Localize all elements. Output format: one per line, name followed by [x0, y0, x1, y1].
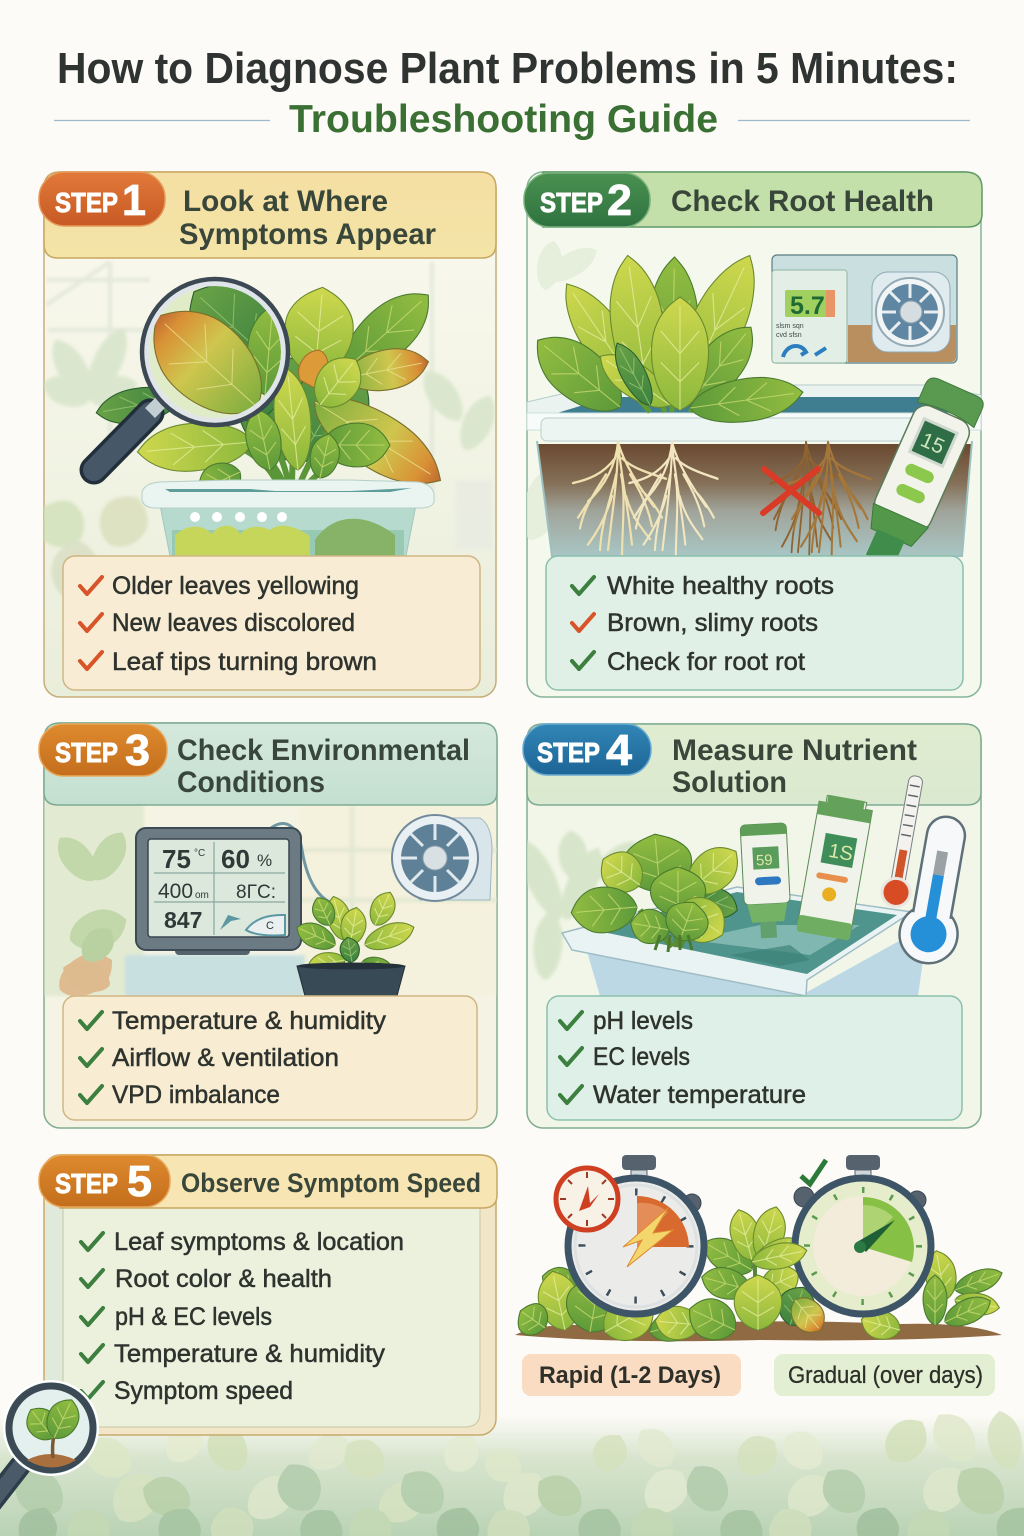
- heading: step 4: Solution: [672, 766, 787, 799]
- illustration: plant: [521, 244, 806, 429]
- checklist: step 5: pH & EC levels: [115, 1303, 272, 1331]
- illustration: faded leaves: [527, 241, 597, 540]
- badge: step 1: [39, 172, 165, 226]
- illustration: meter card and fan: 5.7: [790, 292, 825, 320]
- illustration: garden with stopwatches: [511, 1155, 1006, 1351]
- illustration: potted plant: [292, 888, 418, 996]
- icon: wall fan: [392, 815, 492, 901]
- illustration: cable: [271, 824, 337, 905]
- illustration: tub with roots: [527, 385, 981, 561]
- illustration: meter card and fan: slsm sqn: [776, 323, 804, 330]
- illustration: climate monitor: 8ΓC:: [236, 882, 276, 903]
- illustration: climate monitor: 847: [164, 907, 202, 933]
- label: gradual: Gradual (over days): [788, 1362, 983, 1389]
- label: rapid: [522, 1354, 741, 1396]
- checklist: step 3: VPD imbalance: [112, 1081, 280, 1109]
- heading: step 4: [672, 734, 917, 799]
- checklist: step 4: Water temperature: [593, 1081, 806, 1109]
- soil: [515, 1321, 1002, 1341]
- illustration: meters: 1S: [827, 840, 855, 866]
- heading: step 3: Check Environmental: [177, 734, 470, 767]
- icon: magnifier with seedling: [0, 1381, 98, 1502]
- illustration: greenhouse background: [26, 262, 503, 604]
- ground plants: [511, 1203, 1006, 1351]
- badge: step 5: [39, 1155, 170, 1207]
- left band: [45, 1205, 63, 1415]
- header 2: [543, 172, 982, 227]
- panel 3 frame: [44, 723, 497, 1128]
- heading: step 4: Measure Nutrient: [672, 734, 917, 767]
- checklist: step 5: Temperature & humidity: [114, 1340, 385, 1368]
- badge: step 2: 2: [607, 176, 632, 225]
- heading: step 3: Conditions: [177, 766, 325, 799]
- badge: step 2: STEP: [540, 187, 603, 218]
- badge: step 1: STEP: [55, 187, 118, 218]
- checklist: step 3: Airflow & ventilation: [112, 1044, 339, 1072]
- checklist: step 3: [63, 996, 477, 1120]
- illustration: meter card and fan: cvd sfsn: [776, 332, 802, 339]
- icon: rapid stopwatch: [568, 1155, 704, 1314]
- badge: step 2: [524, 173, 650, 227]
- background foliage strip: [0, 1404, 1024, 1536]
- illustration: climate monitor: 75: [162, 844, 191, 874]
- illustration: climate monitor: om: [195, 890, 209, 901]
- header 1: [44, 172, 496, 258]
- panel: step 3: [39, 723, 497, 1128]
- checklist: step 4: EC levels: [593, 1043, 690, 1071]
- badge: step 3: 3: [125, 726, 150, 775]
- heading: step 3: [177, 734, 470, 799]
- panel: step 4: [509, 724, 981, 1128]
- label: gradual: [774, 1354, 995, 1396]
- illustration: root meter: [852, 375, 986, 574]
- heading: step 5: Observe Symptom Speed: [181, 1168, 481, 1198]
- title: How to Diagnose Plant Problems in 5 Minutes:: [57, 44, 958, 93]
- title: [54, 44, 970, 141]
- checklist: step 1: [63, 556, 480, 690]
- checklist: step 5: [63, 1205, 480, 1427]
- illustration: climate monitor: C: [266, 920, 274, 932]
- illustration: room background: [44, 800, 497, 1006]
- header 4: [527, 724, 981, 805]
- illustration: meters: [740, 793, 874, 941]
- illustration: plant in tub: [93, 277, 455, 556]
- checklist: step 1: Leaf tips turning brown: [112, 648, 377, 676]
- label: rapid: Rapid (1-2 Days): [539, 1362, 721, 1389]
- checklist: step 2: White healthy roots: [607, 572, 834, 600]
- badge: step 1: 1: [122, 176, 146, 225]
- illustration: meters: 59: [756, 852, 773, 869]
- tub: [160, 505, 416, 556]
- icon: green check: [801, 1160, 826, 1184]
- panel 5 frame: [44, 1155, 496, 1435]
- heading: step 1: Look at Where: [183, 185, 388, 218]
- illustration: meter card and fan: [772, 255, 957, 363]
- checklist: step 5: Leaf symptoms & location: [114, 1228, 404, 1256]
- illustration: climate monitor: °C: [194, 848, 205, 859]
- heading: step 1: Symptoms Appear: [179, 218, 436, 251]
- checklist: step 4: pH levels: [593, 1007, 693, 1035]
- checklist: step 5: Root color & health: [115, 1265, 332, 1293]
- panel: step 1: [26, 172, 503, 697]
- illustration: climate monitor: [136, 828, 301, 955]
- heading: step 1: [179, 185, 436, 251]
- leaf overlapping stopwatch: [749, 1238, 809, 1274]
- badge: step 3: STEP: [55, 737, 118, 768]
- illustration: climate monitor: 400: [158, 880, 193, 903]
- checklist: step 4: [547, 996, 962, 1120]
- panel 1 frame: [44, 172, 496, 697]
- icon: blue thermometer: [895, 812, 978, 968]
- badge: step 4: 4: [606, 726, 633, 775]
- icon: gradual stopwatch: [794, 1155, 931, 1314]
- illustration: nutrient tub: [562, 887, 928, 996]
- checklist: step 2: [546, 556, 963, 690]
- checklist: step 1: Older leaves yellowing: [112, 572, 359, 600]
- badge: step 5: STEP: [55, 1168, 118, 1199]
- badge: step 5: 5: [127, 1157, 152, 1206]
- header 5: [60, 1155, 497, 1208]
- checklist: step 2: Check for root rot: [607, 648, 805, 676]
- illustration: climate monitor: 60: [221, 844, 250, 874]
- checklist: step 2: Brown, slimy roots: [607, 609, 818, 637]
- illustration: faded leaves: [527, 830, 636, 980]
- panel 2 frame: [527, 172, 981, 697]
- panel 4 frame: [527, 724, 981, 1128]
- icon: magnifying glass: [94, 263, 297, 470]
- checklist: step 1: New leaves discolored: [112, 609, 355, 637]
- illustration: plant: [569, 831, 749, 953]
- title: Troubleshooting Guide: [289, 98, 718, 141]
- panel: step 2: [512, 172, 986, 697]
- header 3: [44, 723, 497, 805]
- panel: step 5: [39, 1155, 497, 1435]
- illustration: climate monitor: %: [257, 851, 272, 870]
- badge: step 4: [523, 724, 651, 775]
- badge: step 3: [39, 724, 167, 776]
- badge: step 4: STEP: [537, 737, 600, 768]
- checklist: step 5: Symptom speed: [114, 1377, 293, 1405]
- checklist: step 3: Temperature & humidity: [112, 1007, 387, 1035]
- illustration: root meter: 15: [917, 428, 948, 459]
- heading: step 2: Check Root Health: [671, 185, 934, 218]
- icon: red thermometer: [880, 774, 930, 909]
- icon: small red clock: [556, 1168, 618, 1230]
